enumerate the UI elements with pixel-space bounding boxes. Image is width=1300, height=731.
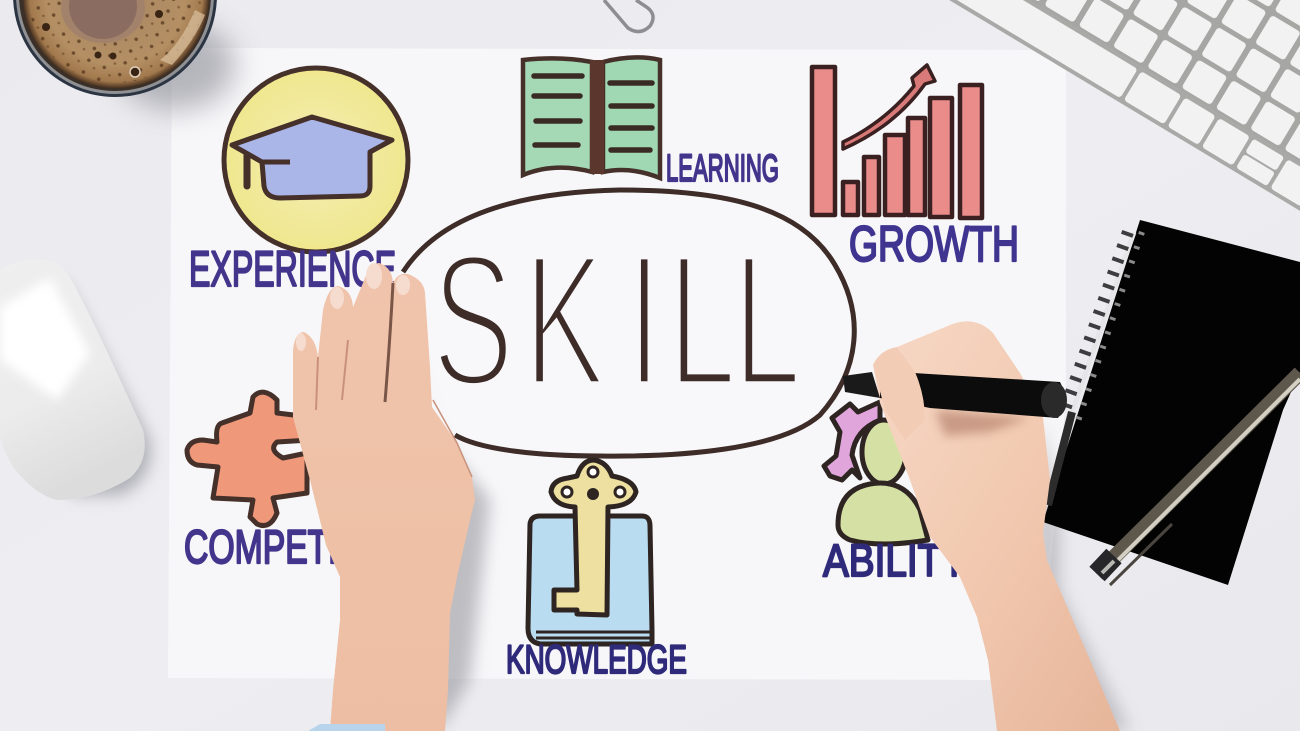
label: growth: GROWTH xyxy=(849,216,1019,272)
left hand shadow xyxy=(400,440,490,731)
heading: SKILL: SKILL xyxy=(432,214,801,425)
icon: open book xyxy=(523,57,660,178)
left hand xyxy=(293,263,475,731)
label: ability: ABILITY xyxy=(823,535,967,586)
right hand shadow xyxy=(1030,420,1130,731)
label: competence: COMPETENCE xyxy=(184,520,422,573)
coffee cup xyxy=(13,0,235,110)
label: experience: EXPERIENCE xyxy=(189,241,396,297)
label: knowledge: KNOWLEDGE xyxy=(506,638,687,682)
black marker xyxy=(843,371,1067,418)
marker shadow on hand xyxy=(935,410,1030,436)
icon: binder clip xyxy=(604,0,653,32)
icon: graduation cap in yellow circle xyxy=(224,68,408,252)
chart: growth bars and arrow xyxy=(812,65,982,218)
panel: paper sheet xyxy=(168,48,1066,680)
keyboard xyxy=(714,0,1300,477)
icon: puzzle piece xyxy=(187,392,310,526)
central oval with SKILL xyxy=(403,190,854,456)
right hand fingertip over marker xyxy=(873,347,925,440)
icon: key on blue book xyxy=(528,460,652,644)
silver pen xyxy=(1097,373,1300,585)
computer mouse xyxy=(0,260,151,500)
notebook xyxy=(1043,220,1300,585)
label: learning: LEARNING xyxy=(666,148,779,190)
icon: gear and person xyxy=(824,402,928,544)
right hand xyxy=(873,321,1120,731)
